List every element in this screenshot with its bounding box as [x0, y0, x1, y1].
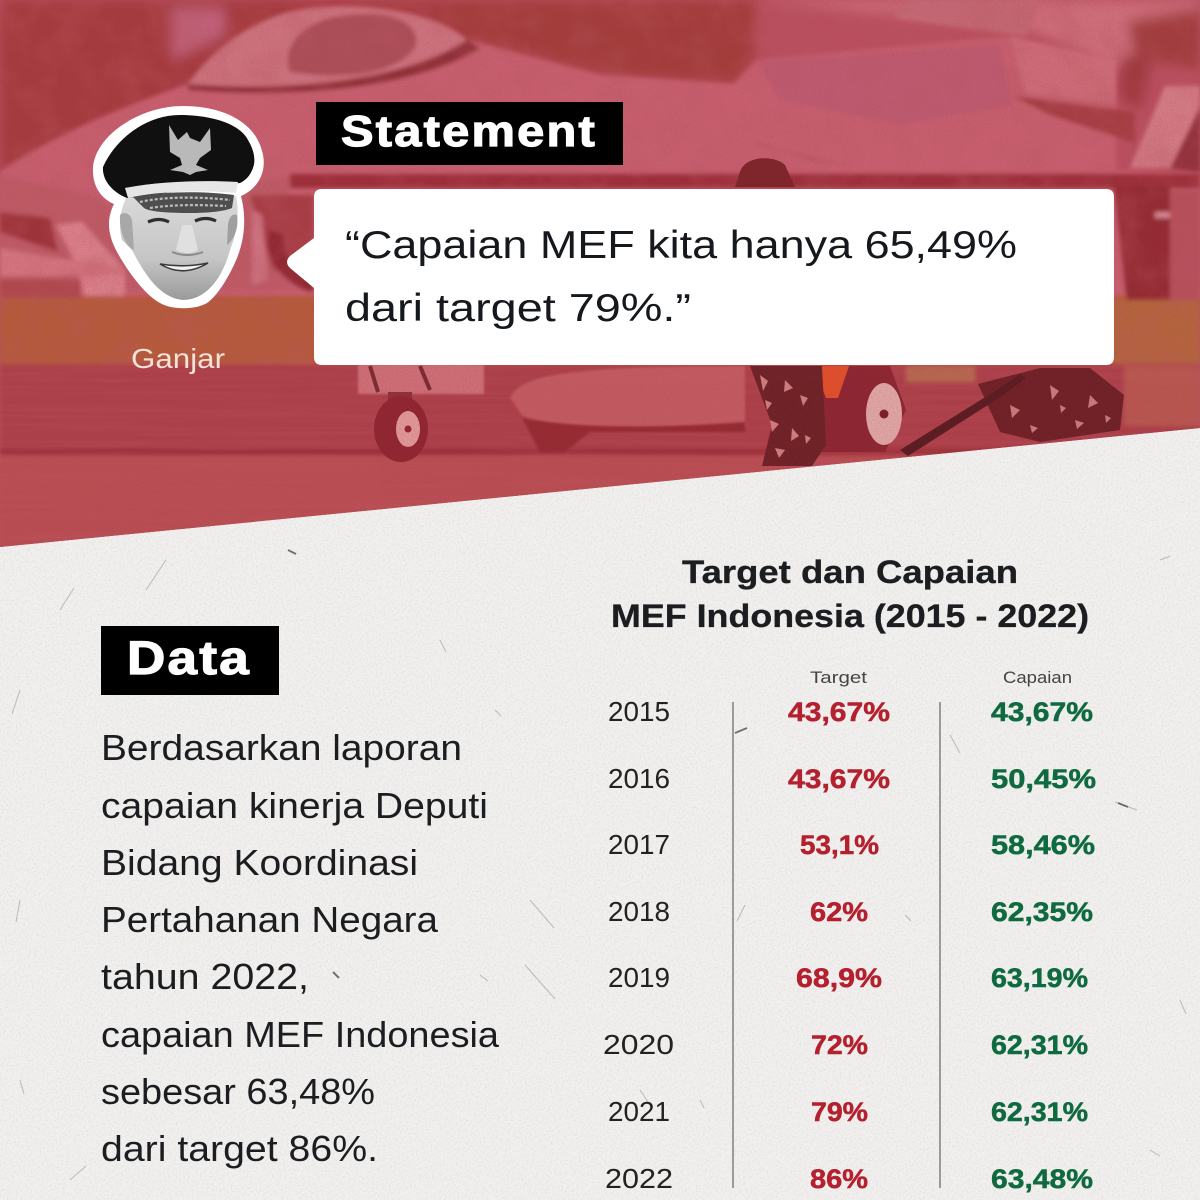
officer cap	[103, 115, 254, 198]
portrait sticker: Ganjar	[93, 106, 264, 308]
data paragraph: Bidang Koordinasi	[101, 842, 418, 883]
target column: 79%	[811, 1097, 868, 1127]
year column: 2022	[605, 1163, 673, 1194]
data paragraph: capaian MEF Indonesia	[101, 1014, 500, 1055]
hero photo: fighter jet with red overlay	[0, 0, 1200, 560]
capaian column: 63,19%	[991, 963, 1088, 993]
year column	[603, 696, 674, 1194]
year column: 2017	[608, 829, 670, 860]
capaian column	[991, 697, 1096, 1194]
data label: Data	[127, 631, 251, 684]
data paragraph: capaian kinerja Deputi	[101, 785, 488, 826]
target column: 86%	[810, 1164, 868, 1194]
year column: 2020	[603, 1029, 674, 1060]
speech bubble with quote: “Capaian MEF kita hanya 65,49%	[345, 224, 1017, 267]
data paragraph: Pertahanan Negara	[101, 899, 439, 940]
capaian column: 43,67%	[991, 697, 1093, 727]
column headers: Capaian	[1003, 668, 1072, 687]
capaian column: 62,35%	[991, 897, 1093, 927]
capaian column: 63,48%	[991, 1164, 1093, 1194]
year column: 2018	[608, 896, 670, 927]
data label	[101, 626, 279, 695]
target column: 72%	[811, 1030, 868, 1060]
table: target and achievement by year	[603, 668, 1096, 1194]
statement label: Statement	[341, 107, 597, 156]
column headers: Target	[810, 668, 867, 687]
capaian column: 58,46%	[991, 830, 1095, 860]
data paragraph	[101, 727, 500, 1169]
trees and sky	[0, 0, 1200, 172]
year column: 2015	[608, 696, 670, 727]
target column: 62%	[810, 897, 868, 927]
year column: 2021	[608, 1096, 670, 1127]
jet fuselage	[0, 0, 1200, 300]
soldiers	[735, 158, 1124, 466]
grain overlay	[0, 0, 1200, 560]
statement label	[316, 102, 623, 165]
target column: 43,67%	[788, 764, 890, 794]
data paragraph: Berdasarkan laporan	[101, 727, 462, 768]
speech bubble with quote: dari target 79%.”	[345, 287, 691, 330]
data paragraph: tahun 2022,	[101, 956, 309, 997]
capaian column: 62,31%	[991, 1097, 1088, 1127]
wing, tail and grass bands	[0, 174, 1200, 554]
target column: 43,67%	[788, 697, 890, 727]
speech bubble with quote	[287, 189, 1114, 365]
portrait caption: Ganjar	[131, 343, 225, 374]
table title: MEF Indonesia (2015 - 2022)	[611, 598, 1089, 634]
data paragraph: dari target 86%.	[101, 1128, 378, 1169]
target column: 53,1%	[800, 830, 879, 860]
runway and foliage texture	[844, 452, 854, 453]
landing gear and fuel tank	[358, 364, 906, 462]
table title: Target dan Capaian	[682, 554, 1018, 590]
data paragraph: sebesar 63,48%	[101, 1071, 375, 1112]
capaian column: 50,45%	[991, 764, 1096, 794]
target column	[788, 697, 890, 1194]
face	[120, 196, 238, 300]
garuda emblem	[169, 125, 211, 175]
capaian column: 62,31%	[991, 1030, 1088, 1060]
table title	[611, 554, 1089, 634]
year column: 2016	[608, 763, 670, 794]
year column: 2019	[608, 962, 670, 993]
target column: 68,9%	[796, 963, 882, 993]
column headers	[810, 668, 1072, 687]
